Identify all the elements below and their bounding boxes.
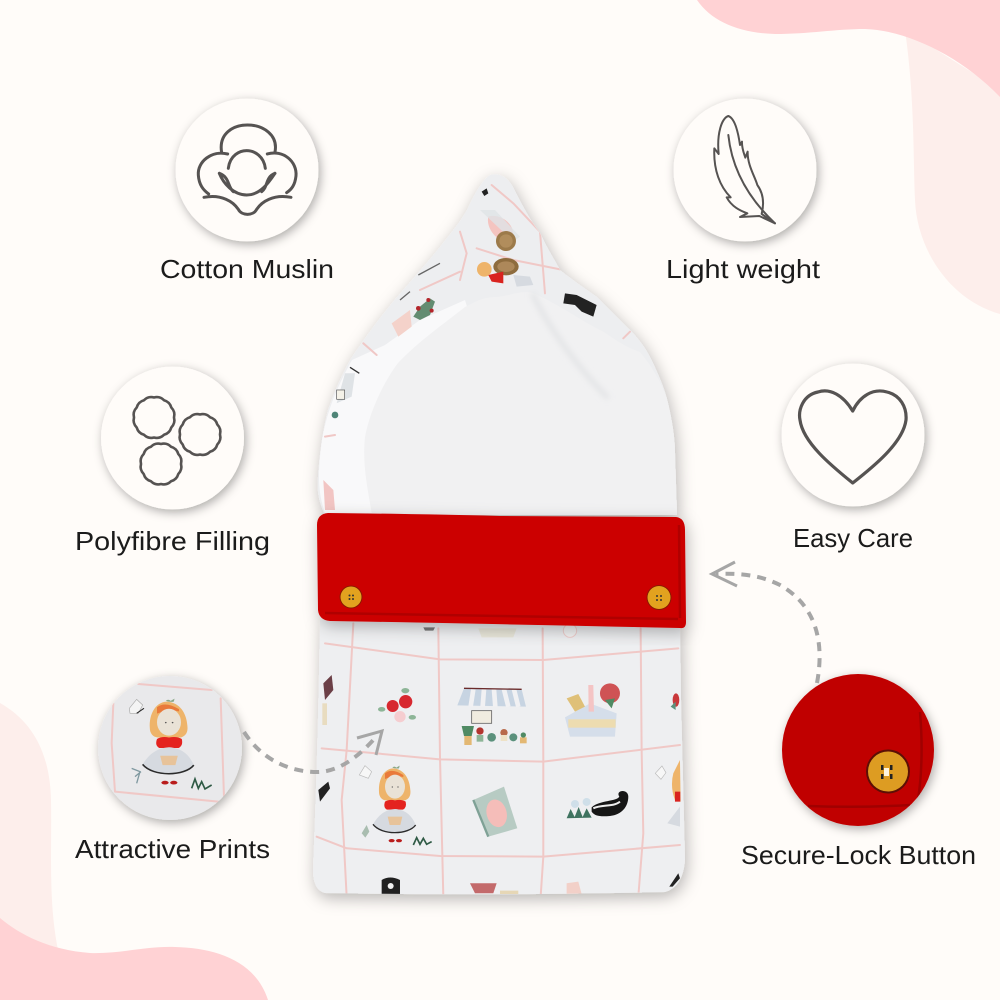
flap seam: [808, 712, 922, 807]
icon: fibre balls: [134, 397, 220, 484]
motif: edge prints: [318, 624, 681, 894]
motif: roses: [378, 688, 416, 722]
motif: picnic basket: [565, 683, 620, 737]
icon badge: feather: [674, 98, 816, 242]
wooden button: [866, 750, 910, 794]
icon badge: polyfibre: [101, 366, 244, 510]
product: nest sleeping bag: [313, 174, 686, 897]
label: Cotton Muslin: Cotton Muslin: [160, 254, 334, 284]
red flap: [317, 513, 686, 628]
motif: book: [473, 787, 517, 837]
button left: [340, 586, 362, 608]
grass: [192, 779, 212, 789]
hood: [318, 174, 677, 515]
fabric grid: [112, 684, 224, 802]
body pouch: [313, 620, 685, 894]
button holes: [881, 765, 892, 779]
body print: [317, 623, 681, 897]
arrow: prints to pouch: [244, 731, 382, 772]
label: Polyfibre Filling: Polyfibre Filling: [75, 526, 270, 556]
girl: [143, 699, 194, 785]
label: Secure-Lock Button: Secure-Lock Button: [741, 840, 976, 870]
detail circle: printed fabric: [98, 676, 242, 820]
icon badge: cotton: [176, 98, 318, 242]
motif: grass and butterfly: [359, 766, 432, 845]
hood left rim: [319, 300, 480, 513]
motif: skunk: [567, 791, 628, 818]
label: Attractive Prints: Attractive Prints: [75, 834, 270, 864]
sprig: [132, 768, 141, 783]
detail circle: secure lock button: [782, 674, 934, 826]
butterfly: [129, 699, 143, 713]
flap seam: [325, 525, 680, 619]
icon: cotton boll: [198, 125, 296, 214]
motif: flower shop: [457, 688, 527, 745]
icon: heart: [800, 391, 906, 483]
hood print: [323, 185, 630, 510]
button right: [646, 585, 672, 610]
label: Light weight: Light weight: [666, 254, 821, 284]
decorative blob: top right: [697, 0, 1000, 314]
icon badge: heart: [782, 364, 924, 506]
hood lining: [364, 292, 677, 515]
decorative blob: bottom left: [0, 703, 268, 1000]
icon: feather: [714, 116, 775, 223]
arrow: button to flap: [712, 562, 820, 683]
motif: girl: [373, 766, 416, 842]
label: Easy Care: Easy Care: [793, 523, 913, 553]
pink grid: [317, 623, 680, 897]
hood fold: [533, 295, 607, 397]
